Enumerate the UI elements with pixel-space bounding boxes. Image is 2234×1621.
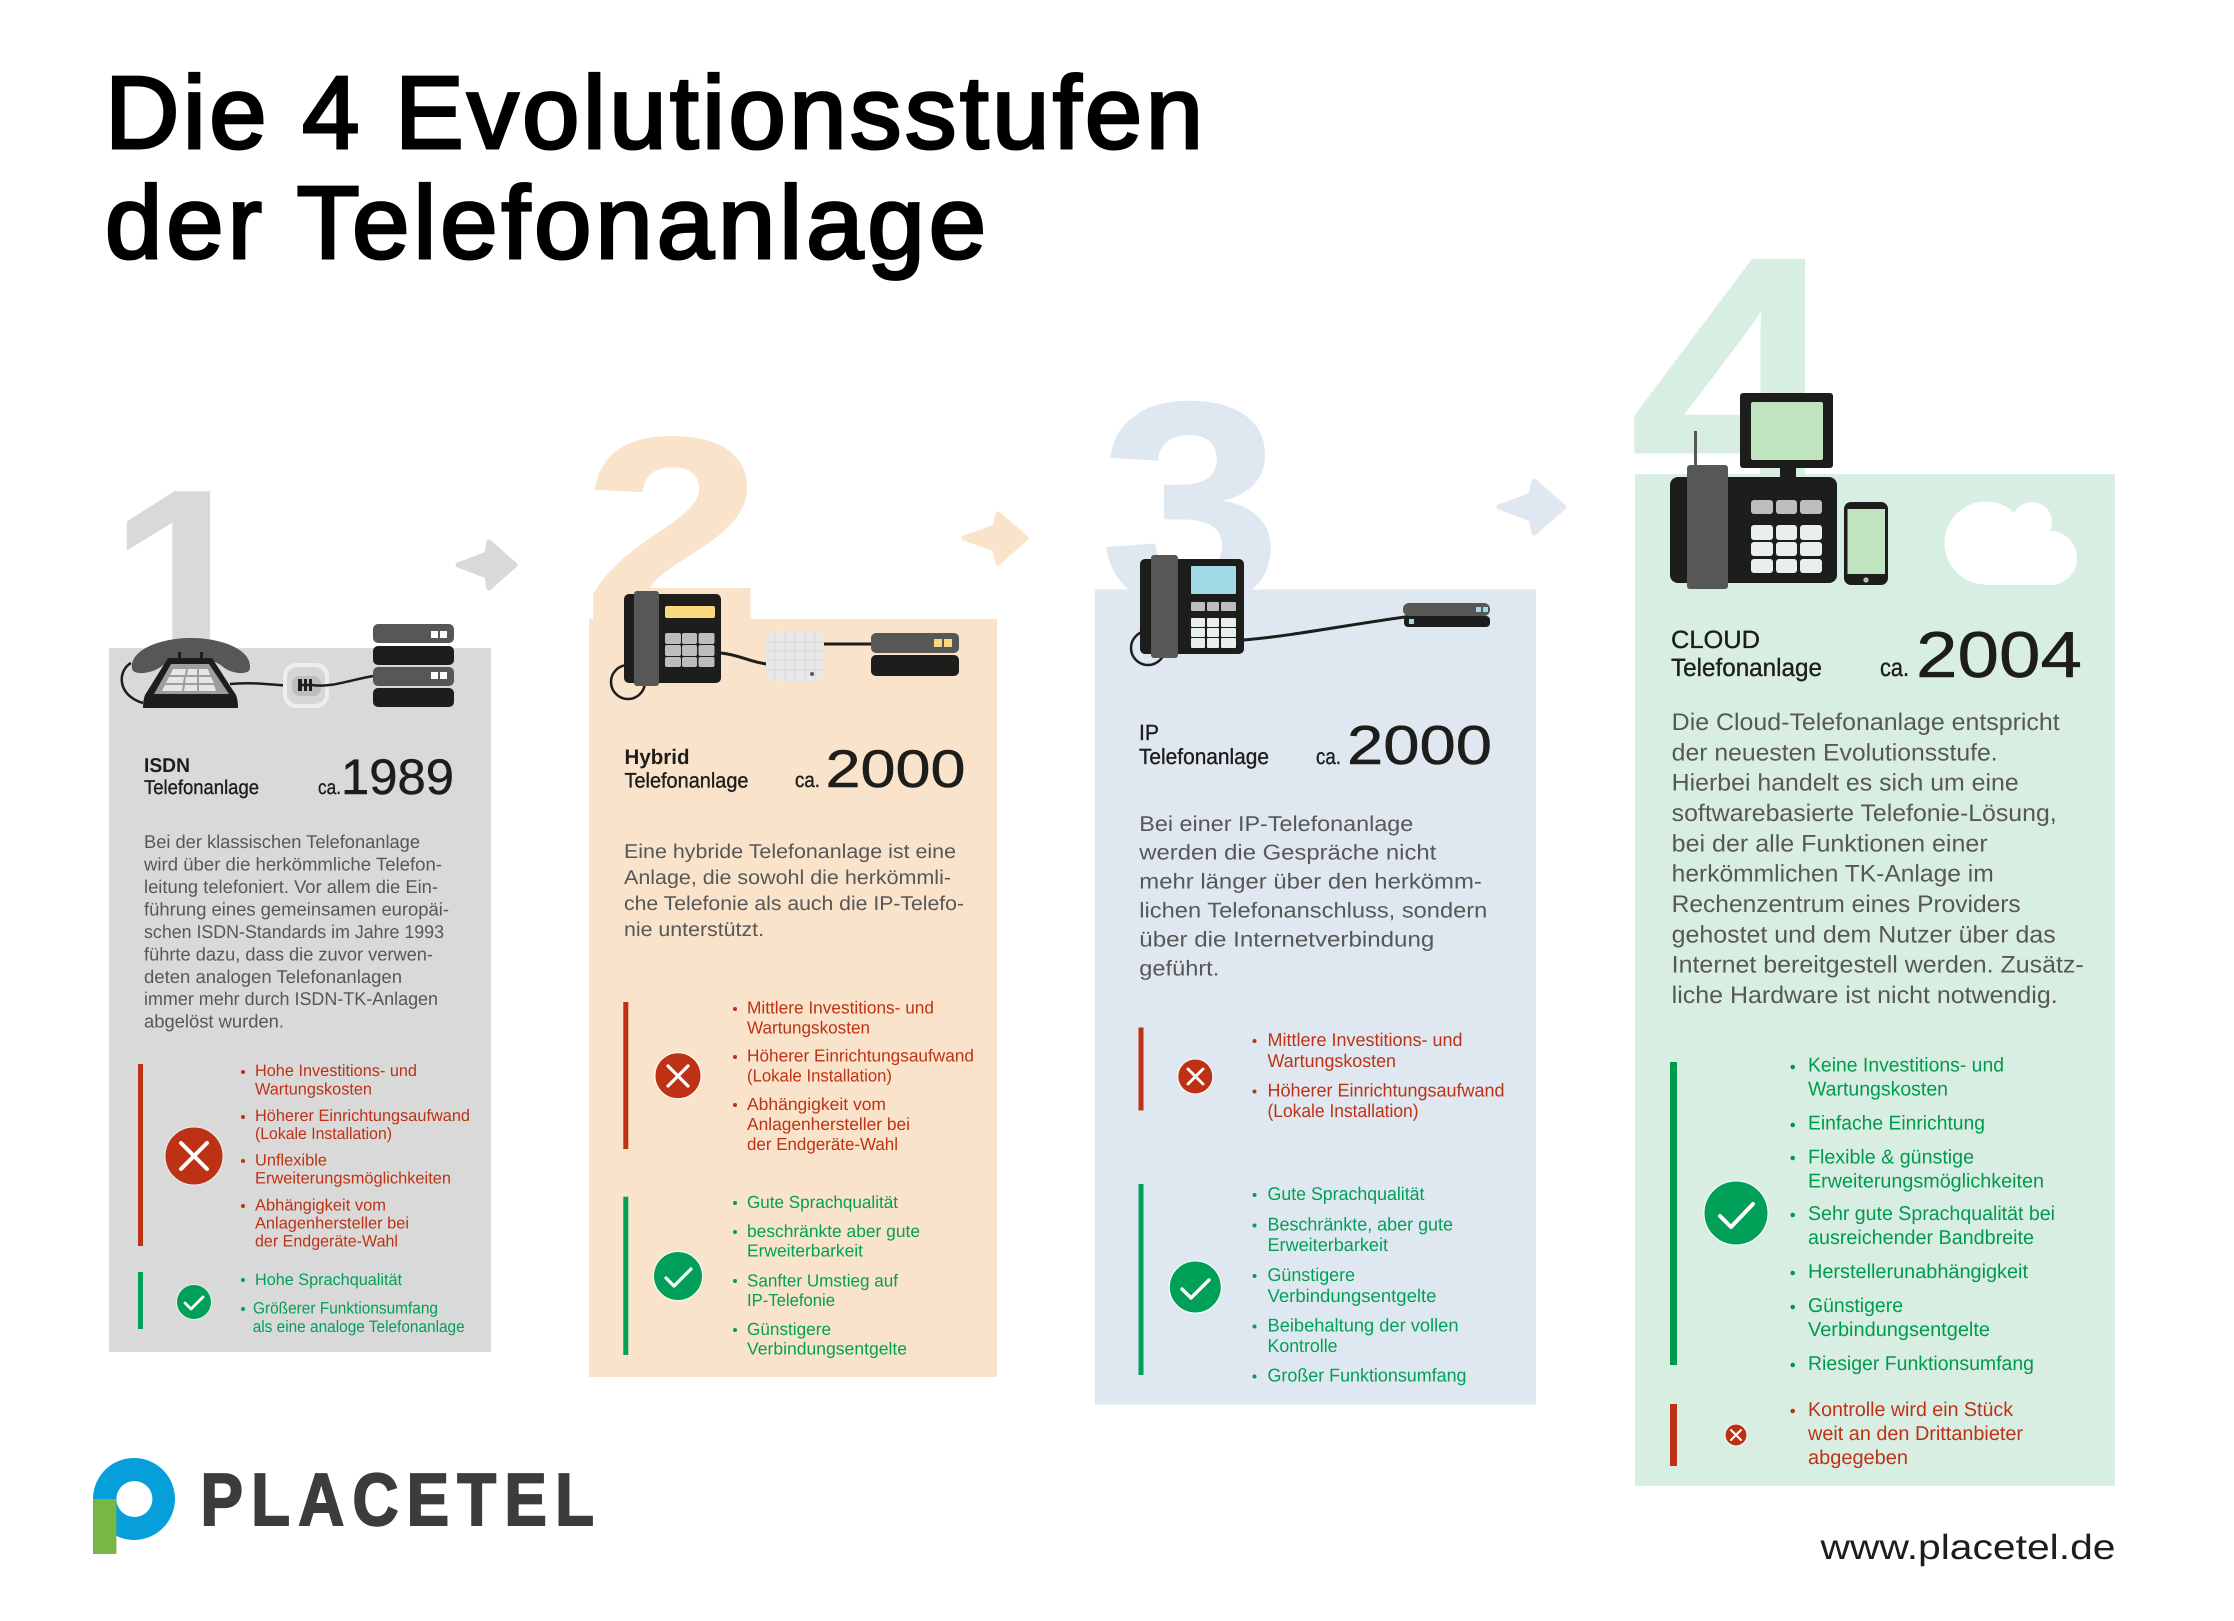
list: pros 3: Großer Funktionsumfang (1268, 1364, 1466, 1386)
icon: check 4 (1704, 1181, 1768, 1245)
year 3 (1316, 714, 1492, 776)
big digit 1: 1 (108, 434, 261, 735)
description 1: führung eines gemeinsamen europäi- (144, 898, 449, 920)
description 3 (1138, 812, 1487, 980)
list: pros 1: als eine analoge Telefonanlage (253, 1318, 465, 1336)
panel: stage 2 Hybrid (584, 385, 997, 1377)
description 3: Bei einer IP-Telefonanlage (1139, 812, 1413, 836)
heading 1 (144, 755, 259, 799)
list: cons 4: abgegeben (1808, 1447, 1908, 1469)
icon: cross 1 (165, 1127, 223, 1185)
icon: rotary telephone (122, 638, 300, 708)
description 4: bei der alle Funktionen einer (1672, 830, 1988, 857)
list: pros 2: beschränkte aber gute (747, 1221, 920, 1241)
list: cons 1: Hohe Investitions- und (255, 1062, 417, 1080)
list: pros 3: Kontrolle (1268, 1335, 1338, 1356)
list: cons 1: Erweiterungsmöglichkeiten (255, 1170, 451, 1188)
icon: smartphone (1844, 502, 1888, 585)
description 1 (143, 831, 449, 1032)
pros 1 (138, 1271, 465, 1336)
big digit 2: 2 (584, 385, 761, 675)
description 4: Rechenzentrum eines Providers (1672, 891, 2021, 918)
list: cons 1: Wartungskosten (255, 1080, 372, 1098)
icon: check 3 (1169, 1261, 1221, 1313)
list: pros 4: Verbindungsentgelte (1808, 1319, 1990, 1341)
list: cons 4: Kontrolle wird ein Stück (1808, 1399, 2014, 1421)
list: cons 1: Unflexible (255, 1152, 327, 1170)
panel: stage 3 IP (1095, 343, 1536, 1404)
list: cons 2: der Endgeräte-Wahl (747, 1134, 898, 1154)
list: pros 2: IP-Telefonie (747, 1290, 835, 1310)
heading 2: Telefonanlage (624, 770, 748, 792)
icon: cross 3 (1178, 1059, 1213, 1094)
panel: stage 1 ISDN (108, 434, 491, 1352)
description 1: deten analogen Telefonanlagen (144, 966, 402, 987)
list: cons 2: Höherer Einrichtungsaufwand (747, 1046, 974, 1066)
list: cons 3: (Lokale Installation) (1268, 1100, 1418, 1121)
list: pros 3: Beibehaltung der vollen (1268, 1314, 1458, 1336)
description 1: leitung telefoniert. Vor allem die Ein- (144, 876, 438, 897)
list: cons 2: Abhängigkeit vom (747, 1094, 886, 1114)
description 2: Eine hybride Telefonanlage ist eine (624, 841, 956, 863)
pros 4 (1670, 1055, 2055, 1375)
list: pros 4: Günstigere (1808, 1295, 1903, 1317)
description 3: mehr länger über den herkömm- (1139, 870, 1482, 894)
list: pros 1 (241, 1271, 465, 1336)
description 1: abgelöst wurden. (144, 1010, 284, 1032)
title: der Telefonanlage (105, 165, 986, 280)
cons 1 (138, 1062, 470, 1251)
description 4: Die Cloud-Telefonanlage entspricht (1672, 709, 2060, 736)
description 4: liche Hardware ist nicht notwendig. (1672, 982, 2058, 1009)
list: pros 3 (1252, 1183, 1466, 1386)
list: cons 3: Mittlere Investitions- und (1268, 1029, 1462, 1050)
title: Die 4 Evolutionsstufen (105, 55, 1203, 170)
panel background 2 (589, 588, 997, 1377)
description 3: über die Internetverbindung (1139, 928, 1434, 952)
cons 3 (1138, 1028, 1504, 1121)
list: cons 3: Wartungskosten (1268, 1050, 1396, 1071)
description 1: schen ISDN-Standards im Jahre 1993 (144, 921, 444, 942)
icon: check 2 (654, 1252, 702, 1300)
description 3: werden die Gespräche nicht (1138, 840, 1436, 864)
list: cons 2: (Lokale Installation) (747, 1066, 892, 1086)
description 2: Anlage, die sowohl die herkömmli- (624, 867, 951, 889)
list: cons 2: Wartungskosten (747, 1018, 870, 1038)
year 3: 2000 (1347, 714, 1492, 776)
panel background 3 (1095, 590, 1536, 1404)
list: cons 1: Anlagenhersteller bei (255, 1215, 409, 1233)
list: pros 2: Erweiterbarkeit (747, 1241, 863, 1261)
list: pros 4: Herstellerunabhängigkeit (1808, 1261, 2028, 1283)
icon: desk phone 3 (1131, 555, 1244, 665)
list: cons 3 (1252, 1029, 1504, 1121)
list: pros 4: Flexible & günstige (1808, 1146, 1974, 1168)
description 1: führte dazu, dass die zuvor verwen- (144, 944, 433, 964)
description 1: Bei der klassischen Telefonanlage (144, 831, 420, 852)
heading 3: IP (1139, 720, 1159, 745)
list: cons 2 (733, 998, 974, 1154)
big digit 3: 3 (1101, 343, 1281, 663)
arrow 3 to 4 (1499, 481, 1564, 533)
list: pros 4: Keine Investitions- und (1808, 1055, 2004, 1077)
description 4: Hierbei handelt es sich um eine (1672, 770, 2019, 797)
description 4: softwarebasierte Telefonie-Lösung, (1672, 800, 2057, 827)
list: pros 4: Sehr gute Sprachqualität bei (1808, 1203, 2055, 1225)
heading 2 (624, 746, 748, 792)
list: cons 1: Höherer Einrichtungsaufwand (255, 1107, 470, 1125)
list: pros 4: Einfache Einrichtung (1808, 1112, 1985, 1134)
description 2: nie unterstützt. (624, 919, 764, 941)
panel background 4 (1635, 474, 2115, 1486)
big digit 4: 4 (1630, 185, 1856, 576)
list: cons 2: Anlagenhersteller bei (747, 1114, 910, 1134)
year 2 (795, 740, 966, 799)
heading 3: Telefonanlage (1139, 744, 1269, 769)
pros 2 (623, 1192, 920, 1359)
list: pros 2: Sanfter Umstieg auf (747, 1271, 898, 1291)
list: pros 1: Größerer Funktionsumfang (253, 1299, 438, 1317)
description 3: geführt. (1139, 956, 1219, 980)
arrow 1 to 2 (458, 542, 515, 588)
list: cons 4: weit an den Drittanbieter (1807, 1423, 2023, 1445)
wordmark: PLACETEL (200, 1458, 594, 1541)
heading 4 (1671, 626, 1822, 682)
panel: stage 4 Cloud (1630, 185, 2115, 1486)
icon: adapter box (766, 631, 824, 682)
icon: server stack (373, 624, 454, 707)
list: pros 4: Erweiterungsmöglichkeiten (1808, 1170, 2044, 1192)
year 4: 2004 (1916, 618, 2082, 691)
icon: cross 4 (1725, 1424, 1747, 1446)
year 3: ca. (1316, 744, 1341, 769)
year 4: ca. (1880, 654, 1909, 682)
list: cons 4 (1790, 1399, 2023, 1469)
list: pros 2: Günstigere (747, 1319, 831, 1339)
panel background 1 (109, 648, 491, 1352)
icon: modem 2 (824, 633, 959, 676)
icon: logo mark (93, 1458, 175, 1554)
description 2 (624, 841, 964, 941)
description 1: wird über die herkömmliche Telefon- (143, 854, 442, 874)
list: cons 1 (241, 1062, 470, 1251)
icon: cloud phone (1670, 393, 1837, 589)
description 1: immer mehr durch ISDN-TK-Anlagen (144, 988, 438, 1009)
arrow 2 to 3 (964, 514, 1026, 563)
list: cons 1: der Endgeräte-Wahl (255, 1233, 398, 1251)
description 4: gehostet und dem Nutzer über das (1672, 921, 2056, 948)
list: pros 4 (1790, 1055, 2055, 1375)
description 4 (1672, 709, 2084, 1009)
icon: cloud (1944, 502, 2077, 585)
list: pros 3: Günstigere (1268, 1264, 1355, 1285)
heading 3 (1139, 720, 1269, 769)
logo: Placetel (93, 1458, 594, 1554)
list: pros 4: Riesiger Funktionsumfang (1808, 1353, 2034, 1375)
year 2: ca. (795, 769, 820, 792)
heading 1: ISDN (144, 755, 190, 777)
heading 4: Telefonanlage (1671, 654, 1822, 682)
list: pros 4: Wartungskosten (1808, 1079, 1948, 1101)
description 4: Internet bereitgestell werden. Zusätz- (1672, 952, 2084, 979)
list: cons 3: Höherer Einrichtungsaufwand (1268, 1080, 1504, 1100)
list: pros 3: Beschränkte, aber gute (1268, 1214, 1453, 1234)
cons 4 (1670, 1399, 2023, 1469)
list: pros 2 (733, 1192, 920, 1359)
description 3: lichen Telefonanschluss, sondern (1139, 898, 1487, 922)
list: pros 1: Hohe Sprachqualität (255, 1271, 402, 1289)
heading 2: Hybrid (624, 746, 690, 769)
heading 4: CLOUD (1671, 626, 1760, 654)
description 4: der neuesten Evolutionsstufe. (1672, 739, 1998, 766)
heading 1: Telefonanlage (144, 777, 259, 799)
website url: www.placetel.de (1819, 1528, 2116, 1567)
pros 3 (1138, 1183, 1466, 1386)
icon: desk phone 2 (611, 591, 767, 699)
description 4: herkömmlichen TK-Anlage im (1672, 861, 1994, 888)
list: pros 3: Gute Sprachqualität (1268, 1183, 1424, 1204)
list: cons 1: Abhängigkeit vom (255, 1196, 386, 1214)
icon: check 1 (176, 1284, 212, 1320)
list: pros 2: Verbindungsentgelte (747, 1339, 907, 1359)
icon: cross 2 (655, 1053, 701, 1099)
description 2: che Telefonie als auch die IP-Telefo- (624, 893, 964, 915)
year 1: 1989 (341, 749, 454, 805)
list: cons 1: (Lokale Installation) (255, 1125, 392, 1143)
list: pros 2: Gute Sprachqualität (747, 1192, 898, 1212)
cons 2 (623, 998, 974, 1154)
icon: modem 3 (1244, 603, 1490, 640)
list: pros 3: Verbindungsentgelte (1268, 1285, 1436, 1306)
list: cons 2: Mittlere Investitions- und (747, 998, 934, 1018)
year 1: ca. (318, 777, 341, 799)
title (105, 55, 1203, 280)
icon: wall socket (283, 663, 373, 708)
year 2: 2000 (826, 740, 966, 799)
list: pros 4: ausreichender Bandbreite (1808, 1227, 2034, 1249)
list: pros 3: Erweiterbarkeit (1268, 1234, 1388, 1255)
